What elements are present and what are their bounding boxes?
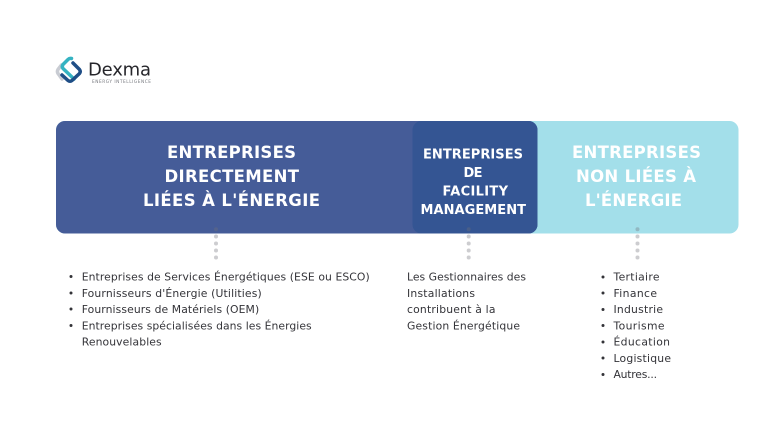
heading: entreprises de facility management: DE	[464, 166, 482, 181]
connector: middle column dots	[467, 227, 471, 260]
text block: non-energy sectors list	[602, 270, 671, 381]
text block: direct energy companies list: Fournisseurs de Matériels (OEM)	[82, 303, 259, 316]
text block: direct energy companies list: Fournisseurs d'Énergie (Utilities)	[82, 287, 262, 300]
heading: entreprises non liées à l'énergie: NON LIÉES À	[576, 167, 696, 186]
panel: non liées à l'énergie (background bar)	[56, 121, 738, 234]
text block: direct energy companies list: Renouvelables	[82, 336, 162, 348]
text block: facility managers	[407, 270, 526, 332]
text block: non-energy sectors list: Logistique	[614, 352, 671, 365]
heading: entreprises directement liées à l'énergie: DIRECTEMENT	[164, 167, 300, 186]
heading: entreprises directement liées à l'énergie: LIÉES À L'ÉNERGIE	[143, 191, 320, 210]
logo: Dexma	[57, 58, 151, 85]
heading: entreprises de facility management: FACILITY	[442, 184, 509, 200]
connector: left column dots	[214, 227, 218, 260]
text block: facility managers: contribuent à la	[407, 303, 496, 316]
heading: entreprises de facility management: MANAGEMENT	[420, 203, 526, 218]
text block: direct energy companies list: Entreprises spécialisées dans les Énergies	[82, 320, 312, 332]
text block: facility managers: Gestion Énergétique	[407, 320, 520, 332]
heading: entreprises de facility management: ENTREPRISES	[423, 148, 523, 162]
connector: right column dots	[636, 227, 640, 260]
heading: entreprises de facility management	[420, 148, 526, 218]
text block: non-energy sectors list: Finance	[614, 287, 657, 300]
text block: non-energy sectors list: Autres...	[614, 368, 657, 381]
heading: entreprises non liées à l'énergie	[572, 143, 701, 210]
text block: facility managers: Installations	[407, 287, 475, 300]
heading: entreprises non liées à l'énergie: ENTREPRISES	[572, 143, 701, 162]
panel: directement liées à l'énergie	[56, 121, 538, 234]
text block: direct energy companies list	[70, 270, 370, 348]
text block: facility managers: Les Gestionnaires des	[407, 270, 526, 284]
heading: entreprises directement liées à l'énergie: ENTREPRISES	[167, 143, 296, 162]
text block: non-energy sectors list: Industrie	[614, 303, 663, 316]
text block: non-energy sectors list: Éducation	[614, 336, 670, 348]
text block: non-energy sectors list: Tertiaire	[612, 270, 660, 284]
heading: entreprises non liées à l'énergie: L'ÉNERGIE	[585, 191, 682, 210]
logo tagline: ENERGY INTELLIGENCE	[92, 79, 151, 85]
panel: facility management	[412, 121, 538, 234]
heading: entreprises directement liées à l'énergie	[143, 143, 320, 210]
text block: non-energy sectors list: Tourisme	[612, 320, 665, 332]
icon: Dexma mark	[57, 58, 80, 81]
logo wordmark: Dexma	[88, 60, 151, 80]
text block: direct energy companies list: Entreprises de Services Énergétiques (ESE ou ESCO)	[82, 270, 370, 284]
